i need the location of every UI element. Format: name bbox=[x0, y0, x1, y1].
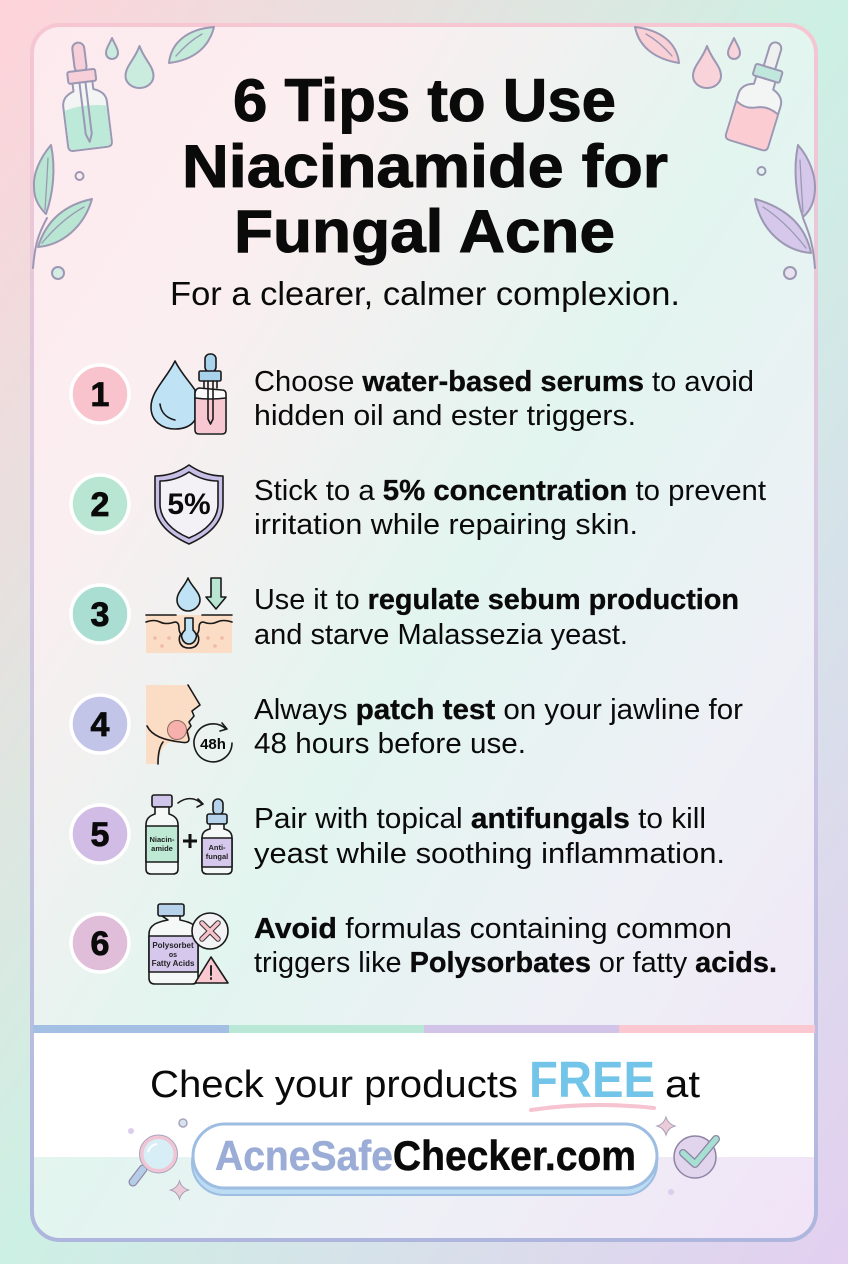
dot bbox=[784, 267, 796, 279]
title: Niacinamide for bbox=[182, 133, 668, 200]
colour stripe bbox=[33, 1025, 815, 1033]
tip 2 text: Stick to a 5% concentration to prevent bbox=[254, 475, 766, 507]
tip 3 text: and starve Malassezia yeast. bbox=[254, 619, 628, 651]
icon: lower lavender leaf bbox=[755, 199, 811, 253]
tip 2 text bbox=[254, 475, 766, 541]
icon: small pink drop bbox=[728, 38, 740, 59]
number badge 2: 2 bbox=[91, 486, 109, 524]
footer call to action bbox=[150, 1051, 700, 1108]
tip 6 text: triggers like Polysorbates or fatty acids. bbox=[254, 947, 777, 979]
title bbox=[182, 67, 668, 265]
tip 4 bbox=[71, 685, 743, 764]
tip 2 bbox=[71, 465, 766, 544]
icon: niacinamide plus antifungal: fungal bbox=[206, 852, 228, 861]
icon: niacinamide plus antifungal bbox=[146, 795, 232, 874]
stem bbox=[33, 218, 47, 268]
decorative dots and sparkle right bbox=[657, 1117, 675, 1195]
icon: check badge bbox=[674, 1136, 716, 1178]
tip 5 text: Pair with topical antifungals to kill bbox=[254, 803, 706, 835]
number badge 2 bbox=[71, 475, 129, 533]
number badge 4: 4 bbox=[91, 706, 110, 744]
icon: polysorbate warning: Polysorbet bbox=[152, 941, 194, 950]
footer call to action: Check your products bbox=[150, 1064, 518, 1106]
icon: small mint drop bbox=[106, 38, 118, 59]
tip 4 text: 48 hours before use. bbox=[254, 728, 526, 760]
dot bbox=[758, 167, 766, 175]
icon: drop and serum bbox=[151, 354, 226, 434]
stem bbox=[803, 218, 815, 268]
icon: pink dropper bottle bbox=[725, 36, 798, 151]
tip 1 bbox=[71, 354, 754, 434]
number badge 1: 1 bbox=[91, 376, 109, 414]
subtitle: For a clearer, calmer complexion. bbox=[170, 275, 680, 312]
title: Fungal Acne bbox=[234, 198, 615, 265]
icon: lower mint leaf bbox=[38, 199, 92, 247]
icon: jawline patch test: 48h bbox=[200, 736, 226, 753]
icon: large mint drop bbox=[126, 46, 154, 88]
icon: left mint leaf bbox=[34, 145, 53, 214]
tip 1 text: Choose water-based serums to avoid bbox=[254, 366, 754, 398]
number badge 5: 5 bbox=[91, 816, 109, 854]
icon: polysorbate warning bbox=[149, 904, 228, 984]
tip 6 text: Avoid formulas containing common bbox=[254, 913, 732, 945]
icon: shield 5% bbox=[155, 465, 223, 544]
icon: mint dropper bottle bbox=[56, 40, 112, 152]
icon: top mint leaf bbox=[169, 27, 214, 63]
tip 4 text bbox=[254, 694, 743, 760]
number badge 6: 6 bbox=[91, 925, 109, 963]
number badge 4 bbox=[71, 695, 129, 753]
tip 2 text: irritation while repairing skin. bbox=[254, 509, 638, 541]
decoration: top right botanicals bbox=[635, 27, 815, 279]
number badge 3: 3 bbox=[91, 596, 109, 634]
FREE underline bbox=[531, 1105, 654, 1110]
icon: jawline patch test bbox=[146, 685, 232, 764]
dot bbox=[76, 172, 84, 180]
footer call to action: FREE bbox=[529, 1051, 655, 1108]
icon: right lavender leaf bbox=[796, 145, 815, 217]
icon: niacinamide plus antifungal: amide bbox=[151, 844, 173, 853]
tip 6 bbox=[71, 904, 777, 984]
tip 3 text bbox=[254, 584, 739, 651]
number badge 6 bbox=[71, 914, 129, 972]
icon: polysorbate warning: Fatty Acids bbox=[152, 959, 195, 968]
decoration: top left botanicals bbox=[33, 27, 214, 279]
footer call to action: at bbox=[665, 1064, 700, 1106]
icon: top pink leaf bbox=[635, 27, 679, 63]
number badge 1 bbox=[71, 365, 129, 423]
title: 6 Tips to Use bbox=[233, 67, 616, 134]
icon: niacinamide plus antifungal: Niacin- bbox=[149, 835, 175, 844]
number badge 5 bbox=[71, 805, 129, 863]
icon: polysorbate warning: os bbox=[169, 952, 177, 959]
tip 1 text: hidden oil and ester triggers. bbox=[254, 400, 636, 432]
number badge 3 bbox=[71, 585, 129, 643]
icon: magnifying glass bbox=[133, 1135, 178, 1182]
icon: large pink drop bbox=[693, 46, 721, 88]
footer white band bbox=[33, 1033, 815, 1157]
icon: shield 5%: 5% bbox=[167, 488, 211, 521]
tip 6 text bbox=[254, 913, 777, 979]
URL pill: AcneSafeChecker.com bbox=[215, 1132, 636, 1179]
tip 5 text: yeast while soothing inflammation. bbox=[254, 838, 725, 870]
tip 5 bbox=[71, 795, 725, 874]
URL pill bbox=[192, 1124, 657, 1195]
icon: niacinamide plus antifungal: Anti- bbox=[208, 843, 226, 852]
tip 4 text: Always patch test on your jawline for bbox=[254, 694, 743, 726]
tip 3 bbox=[71, 578, 739, 653]
tip 5 text bbox=[254, 803, 725, 870]
dot bbox=[52, 267, 64, 279]
tip 1 text bbox=[254, 366, 754, 432]
decorative dots and sparkles left bbox=[128, 1119, 188, 1199]
tip 3 text: Use it to regulate sebum production bbox=[254, 584, 739, 616]
icon: sebum skin diagram bbox=[146, 578, 232, 653]
